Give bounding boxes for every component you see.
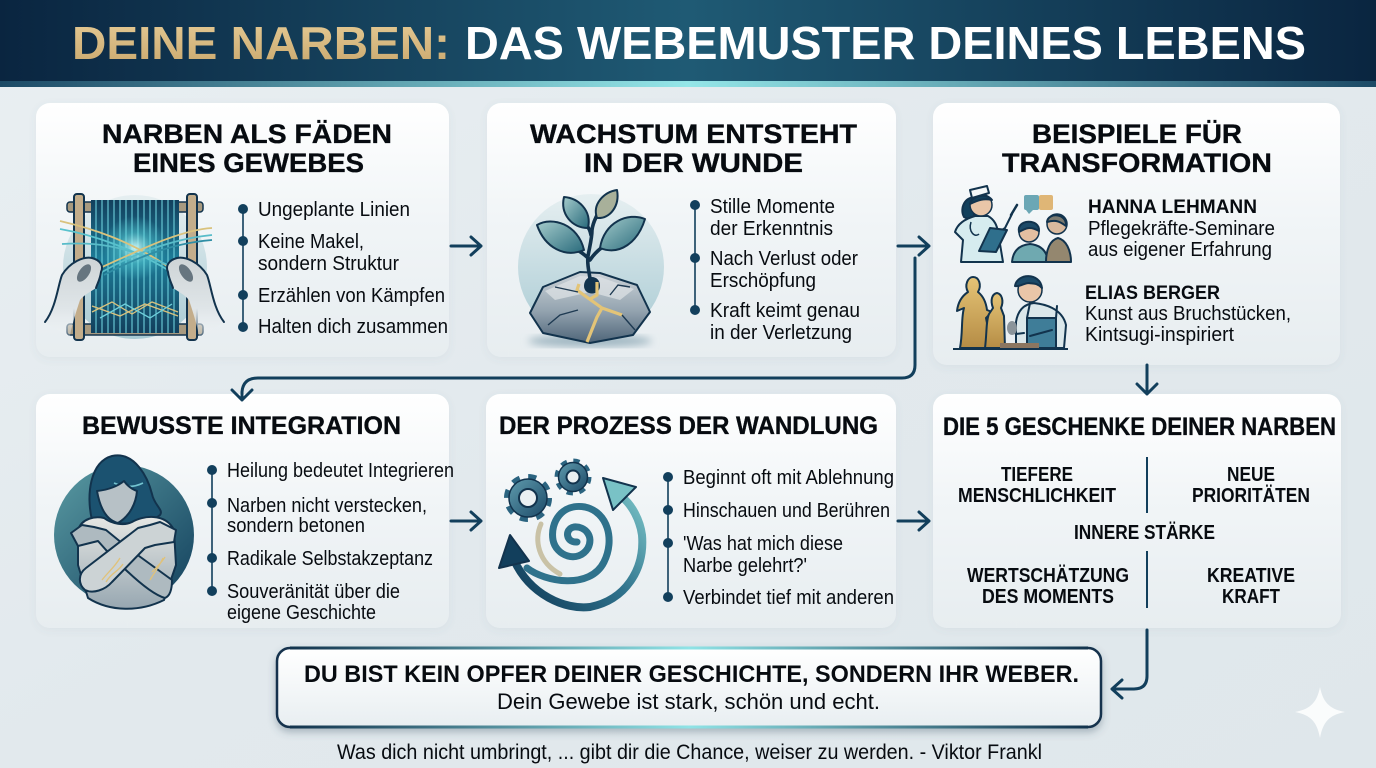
- heading: [1002, 119, 1272, 178]
- quote: Was dich nicht umbringt, ... gibt dir die Chance, weiser zu werden. - Viktor Frankl: [337, 741, 1042, 764]
- panel: Beispiele für Transformation: [933, 103, 1340, 365]
- arrow: panel 3 to 6: [1137, 365, 1157, 394]
- bullet list: Verbindet tief mit anderen: [683, 587, 894, 609]
- gift: Neue Prioritäten: [1192, 464, 1310, 507]
- icon: nurse teaching two listeners: [955, 186, 1071, 262]
- heading: [102, 119, 392, 178]
- bullet list: Beginnt oft mit Ablehnung: [683, 467, 894, 489]
- bullet list: [690, 196, 860, 344]
- text: Elias Berger: ELIAS BERGER: [1085, 283, 1220, 304]
- title: [72, 17, 1306, 69]
- heading: EINES GEWEBES: [133, 148, 364, 178]
- bullet list: Narbe gelehrt?': [683, 555, 807, 577]
- arrow: panel 4 to 5: [451, 512, 481, 530]
- text: Hanna Lehmann: Pflegekräfte-Seminare: [1088, 218, 1275, 240]
- bullet list: Halten dich zusammen: [258, 316, 448, 338]
- bullet list: Erzählen von Kämpfen: [258, 285, 445, 307]
- arrow: panel 5 to 6: [898, 512, 929, 530]
- heading: BEWUSSTE INTEGRATION: [82, 412, 401, 440]
- bullet list: Stille Momente: [710, 196, 835, 218]
- bullet list: Keine Makel,: [258, 231, 364, 253]
- gift: Kreative Kraft: KRAFT: [1222, 586, 1280, 608]
- callout: [277, 648, 1101, 727]
- bullet list: 'Was hat mich diese: [683, 533, 843, 555]
- heading: TRANSFORMATION: [1002, 148, 1272, 178]
- panel: Wachstum entsteht in der Wunde: [487, 103, 896, 357]
- heading: WACHSTUM ENTSTEHT: [530, 119, 858, 149]
- title: DAS WEBEMUSTER DEINES LEBENS: [465, 17, 1306, 69]
- arrow: connector from top row to panel 4: [232, 258, 915, 400]
- bullet list: [663, 467, 894, 609]
- gift: Neue Prioritäten: NEUE: [1227, 464, 1275, 486]
- bullet list: sondern betonen: [227, 515, 365, 537]
- gift: Tiefere Menschlichkeit: MENSCHLICHKEIT: [958, 485, 1116, 507]
- heading: DER PROZESS DER WANDLUNG: [499, 412, 878, 440]
- panel: Bewusste Integration: [36, 394, 454, 628]
- bullet list: Heilung bedeutet Integrieren: [227, 460, 454, 482]
- gift: Tiefere Menschlichkeit: [958, 464, 1116, 507]
- callout: Dein Gewebe ist stark, schön und echt.: [497, 689, 880, 714]
- icon: artisan with golden statues: [953, 276, 1068, 349]
- bullet list: Ungeplante Linien: [258, 199, 410, 221]
- arrow: panel 6 to callout: [1112, 630, 1147, 698]
- text: Elias Berger: [1085, 283, 1291, 346]
- bullet list: sondern Struktur: [258, 253, 399, 275]
- icon: gears and spiral arrow: [499, 461, 642, 607]
- bullet list: Radikale Selbstakzeptanz: [227, 548, 433, 570]
- bullet list: Souveränität über die: [227, 581, 400, 603]
- text: Elias Berger: Kintsugi-inspiriert: [1085, 324, 1234, 346]
- title: DEINE NARBEN:: [72, 17, 450, 69]
- gift: Tiefere Menschlichkeit: TIEFERE: [1001, 464, 1073, 486]
- gift: Wertschätzung des Moments: WERTSCHÄTZUNG: [967, 564, 1129, 587]
- bullet list: Hinschauen und Berühren: [683, 500, 890, 522]
- gift: Kreative Kraft: [1207, 565, 1295, 608]
- gift: Kreative Kraft: KREATIVE: [1207, 565, 1295, 587]
- text: Elias Berger: Kunst aus Bruchstücken,: [1085, 303, 1291, 325]
- bullet list: Nach Verlust oder: [710, 248, 858, 270]
- bullet list: [238, 199, 448, 338]
- panel: Narben als Fäden: [36, 103, 449, 357]
- title banner: [0, 0, 1376, 87]
- bullet list: Kraft keimt genau: [710, 300, 860, 322]
- callout: DU BIST KEIN OPFER DEINER GESCHICHTE, SONDERN IHR WEBER.: [304, 661, 1079, 688]
- bullet list: Narben nicht verstecken,: [227, 495, 427, 517]
- panel: Die 5 Geschenke: [933, 394, 1341, 628]
- icon: figure embracing herself: [54, 455, 194, 609]
- bullet list: [207, 460, 454, 624]
- gift: Innere Stärke: INNERE STÄRKE: [1074, 521, 1215, 544]
- bullet list: eigene Geschichte: [227, 602, 376, 624]
- text: Hanna Lehmann: [1088, 197, 1275, 261]
- bullet list: der Erkenntnis: [710, 218, 833, 240]
- icon: sparkle watermark: [1295, 687, 1345, 738]
- bullet list: Erschöpfung: [710, 270, 816, 292]
- heading: IN DER WUNDE: [584, 148, 803, 178]
- heading: DIE 5 GESCHENKE DEINER NARBEN: [943, 413, 1336, 441]
- heading: BEISPIELE FÜR: [1032, 119, 1242, 149]
- gift: Wertschätzung des Moments: DES MOMENTS: [982, 586, 1114, 608]
- panel: Der Prozess der Wandlung: [486, 394, 896, 628]
- arrow: panel 2 to 3: [898, 237, 929, 255]
- text: Hanna Lehmann: aus eigener Erfahrung: [1088, 239, 1272, 261]
- heading: NARBEN ALS FÄDEN: [102, 119, 392, 149]
- arrow: panel 1 to 2: [451, 237, 481, 255]
- bullet list: in der Verletzung: [710, 322, 852, 344]
- heading: [530, 119, 858, 178]
- gift: Neue Prioritäten: PRIORITÄTEN: [1192, 484, 1310, 507]
- text: Hanna Lehmann: HANNA LEHMANN: [1088, 197, 1257, 218]
- icon: plant growing from cracked rock: [518, 190, 664, 347]
- gift: Wertschätzung des Moments: [967, 564, 1129, 608]
- icon: loom with hands: [45, 194, 224, 340]
